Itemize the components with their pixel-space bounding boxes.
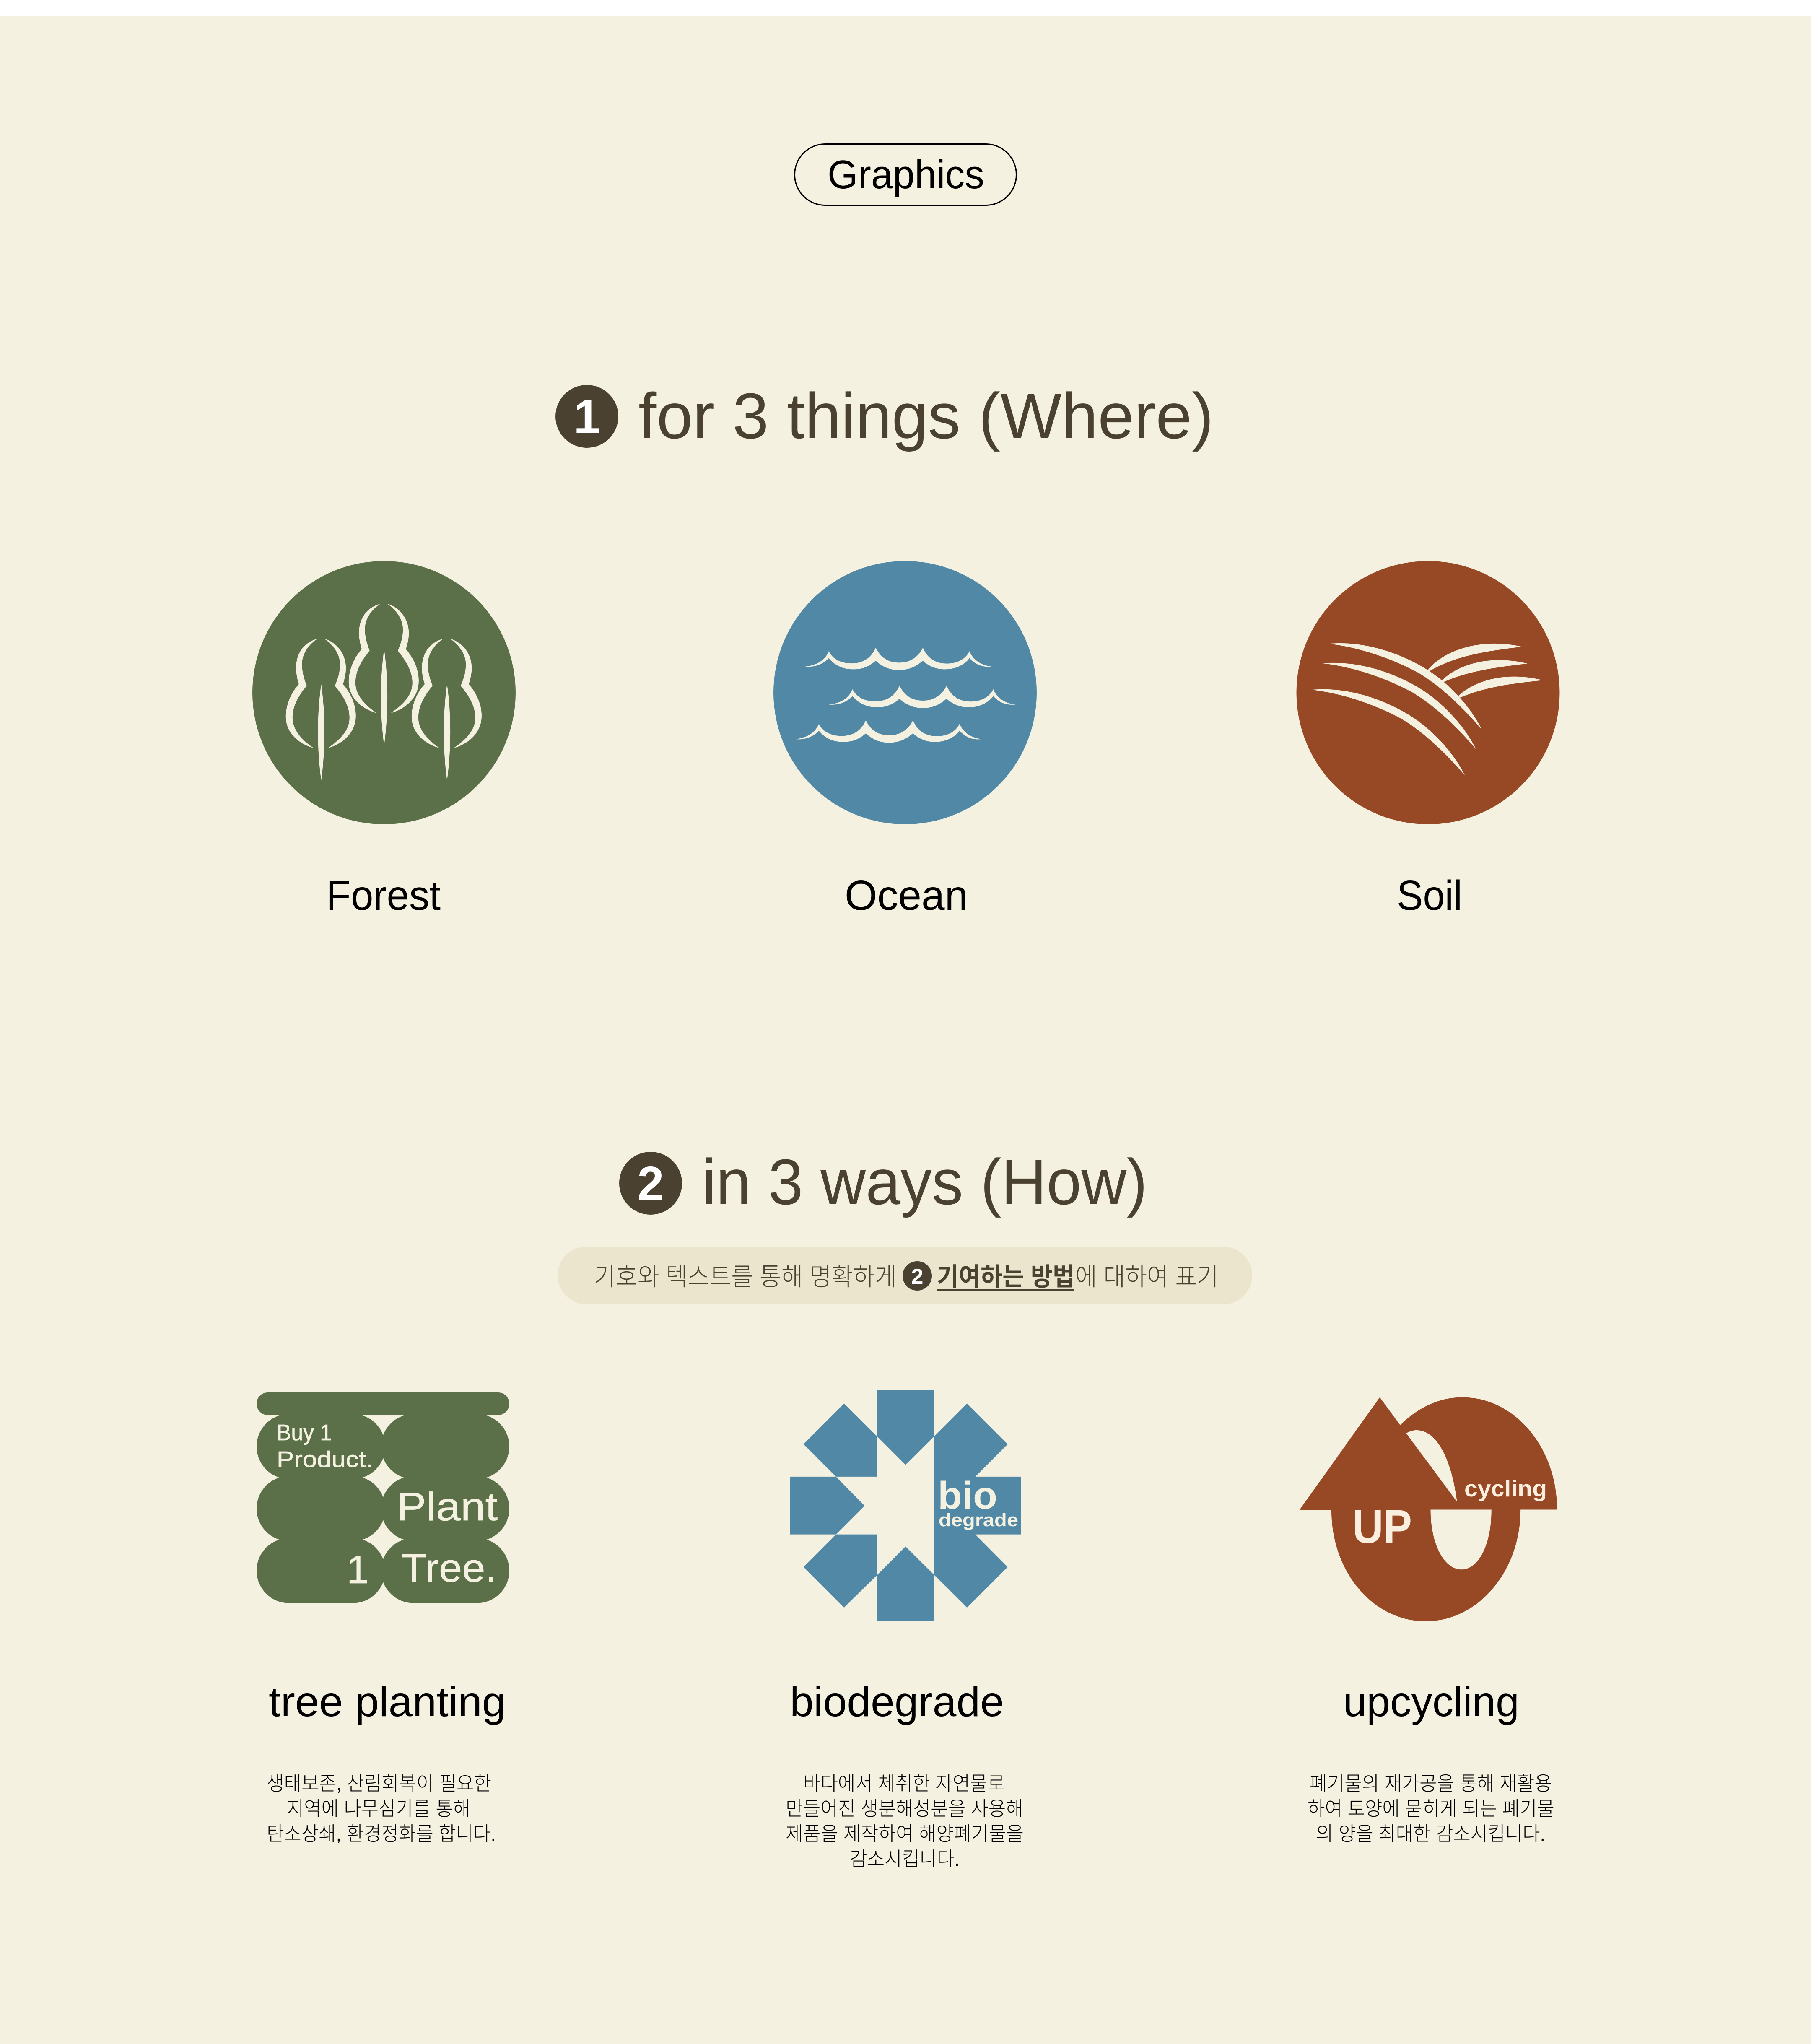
icon: biodegrade: bio: [938, 1474, 997, 1517]
heading: in 3 ways (How): 2: [637, 1157, 664, 1210]
tag: Graphics: Graphics: [828, 152, 984, 197]
icon: buy 1 plant 1 tree: Product.: [277, 1447, 373, 1472]
tag: Graphics: [795, 144, 1016, 205]
icon: buy 1 plant 1 tree: Tree.: [401, 1546, 497, 1590]
callout: contribution note: 기호와 텍스트를 통해 명확하게: [594, 1263, 897, 1291]
callout: contribution note: 에 대하여 표기: [1075, 1263, 1219, 1291]
label: Forest: Forest: [326, 872, 441, 919]
icon: soil: [1296, 561, 1559, 824]
description: upcycling: 폐기물의 재가공을 통해 재활용: [1310, 1772, 1552, 1795]
icon: buy 1 plant 1 tree: 1: [347, 1548, 369, 1592]
description: biodegrade: 제품을 제작하여 해양폐기물을: [786, 1823, 1024, 1845]
label: Ocean: Ocean: [845, 872, 968, 919]
icon: upcycling: UP: [1352, 1500, 1412, 1553]
panel: soil: [1296, 561, 1559, 919]
label: tree planting: tree planting: [269, 1678, 506, 1725]
heading: in 3 ways (How): in 3 ways (How): [702, 1146, 1147, 1218]
description: upcycling: [1308, 1772, 1554, 1845]
icon: buy 1 plant 1 tree: Buy 1: [277, 1420, 332, 1445]
description: upcycling: 의 양을 최대한 감소시킵니다.: [1316, 1823, 1545, 1845]
panel: upcycling: [1299, 1397, 1557, 1845]
icon: forest: [252, 561, 516, 824]
icon: biodegrade: [790, 1390, 1021, 1621]
icon: buy 1 plant 1 tree: [257, 1392, 509, 1603]
icon: ocean: [773, 561, 1037, 824]
description: tree planting: 지역에 나무심기를 통해: [287, 1797, 470, 1820]
description: upcycling: 하여 토양에 묻히게 되는 폐기물: [1308, 1797, 1554, 1820]
description: biodegrade: [786, 1772, 1024, 1870]
description: biodegrade: 바다에서 체취한 자연물로: [803, 1772, 1005, 1795]
panel: forest: [252, 561, 516, 919]
panel: ocean: [773, 561, 1037, 919]
description: tree planting: [267, 1772, 496, 1845]
callout: contribution note: 2: [911, 1265, 923, 1289]
heading: for 3 things (Where): for 3 things (Where): [638, 380, 1214, 452]
description: tree planting: 탄소상쇄, 환경정화를 합니다.: [267, 1823, 496, 1845]
description: biodegrade: 만들어진 생분해성분을 사용해: [786, 1797, 1023, 1820]
icon: upcycling: [1299, 1397, 1557, 1621]
panel: biodegrade: [786, 1390, 1024, 1870]
description: biodegrade: 감소시킵니다.: [850, 1848, 960, 1870]
heading: for 3 things (Where): 1: [573, 390, 600, 444]
description: tree planting: 생태보존, 산림회복이 필요한: [267, 1772, 491, 1795]
label: upcycling: upcycling: [1343, 1678, 1519, 1725]
callout: contribution note: [558, 1247, 1252, 1304]
icon: biodegrade: degrade: [939, 1510, 1018, 1530]
panel: tree planting: [257, 1392, 509, 1845]
icon: upcycling: cycling: [1464, 1475, 1547, 1501]
icon: buy 1 plant 1 tree: Plant: [397, 1485, 498, 1529]
label: Soil: Soil: [1397, 872, 1462, 919]
callout: contribution note: 기여하는 방법: [937, 1263, 1074, 1291]
label: biodegrade: biodegrade: [790, 1678, 1004, 1725]
